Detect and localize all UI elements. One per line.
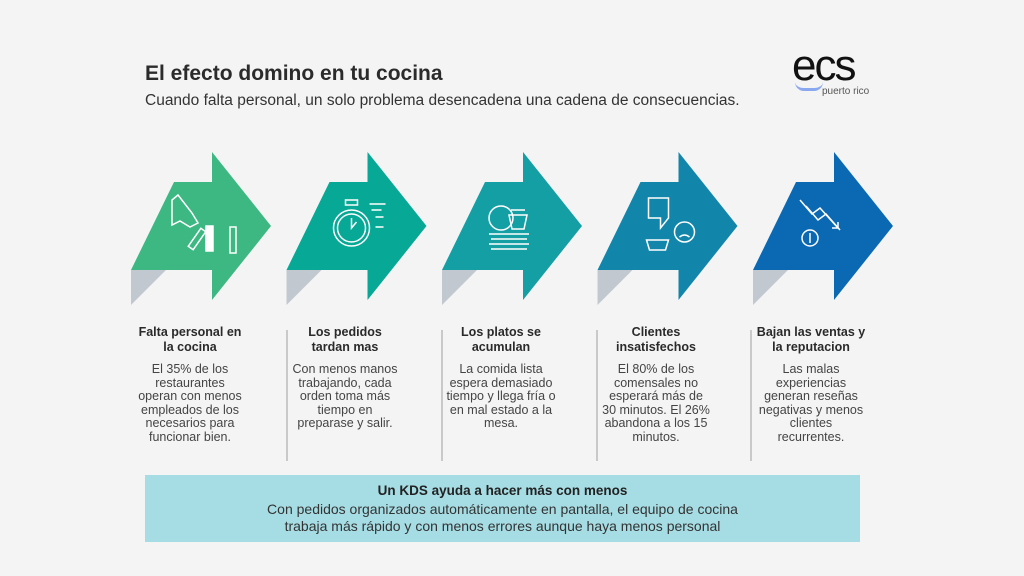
- logo: ecs: [792, 41, 854, 90]
- column 1: Falta personal en la cocina: [139, 325, 241, 354]
- column 2: Los pedidos: [308, 325, 382, 339]
- callout: KDS: Con pedidos organizados automáticamente en pantalla, el equipo de cocina: [267, 501, 738, 517]
- arrow 1: [131, 152, 271, 305]
- column 5: [757, 325, 866, 444]
- arrow 2: [286, 152, 426, 305]
- column 4: Clientes insatisfechos: [616, 325, 696, 354]
- column 3: [446, 325, 556, 430]
- subtitle: Cuando falta personal, un solo problema desencadena una cadena de consecuencias.: [145, 92, 740, 109]
- column 2: Con menos manos trabajando, cada orden toma más tiempo en preparase y salir.: [293, 362, 397, 430]
- arrows: [131, 152, 893, 305]
- column 2: tardan mas: [312, 340, 378, 354]
- arrow 3: [442, 152, 582, 305]
- callout: KDS: Un KDS ayuda a hacer más con menos: [378, 483, 627, 498]
- column 5: Bajan las ventas y la reputacion: [757, 325, 865, 354]
- arrow 4: [598, 152, 738, 305]
- column 3: Los platos se acumulan: [461, 325, 541, 354]
- icon: stopwatch: [334, 200, 386, 246]
- column 5: Las malas experiencias generan reseñas negativas y menos clientes recurrentes.: [759, 362, 863, 444]
- column 3: La comida lista espera demasiado tiempo y llega fría o en mal estado a la mesa.: [446, 362, 556, 430]
- title: El efecto domino en tu cocina: [145, 62, 443, 85]
- callout: KDS: [145, 475, 860, 542]
- icon: thumbs down: [646, 198, 694, 250]
- icon: hand domino: [172, 195, 236, 253]
- column 2: [293, 325, 397, 430]
- callout: KDS: trabaja más rápido y con menos errores aunque haya menos personal: [285, 518, 720, 534]
- icon: falling sales: [800, 200, 840, 246]
- logo: puerto rico: [822, 86, 869, 97]
- column 1: [138, 325, 242, 444]
- arrow 5: [753, 152, 893, 305]
- column 1: El 35% de los restaurantes operan con menos empleados de los necesarios para funcionar bien.: [138, 362, 242, 444]
- column 4: El 80% de los comensales no esperará más de 30 minutos. El 26% abandona a los 15 minutos.: [602, 362, 710, 444]
- icon: plates: [489, 206, 529, 249]
- column 4: [602, 325, 710, 444]
